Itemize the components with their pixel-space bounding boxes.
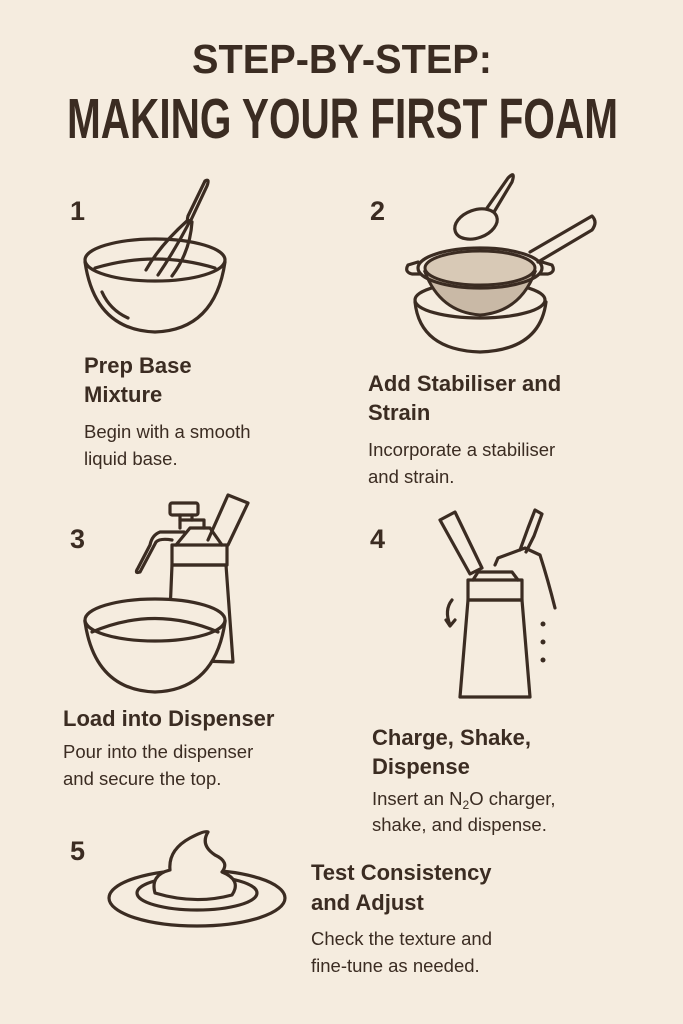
- icon: sieve and bowl with spoon: [407, 175, 595, 352]
- step 4: 2: [462, 798, 470, 812]
- icon: foam on plate: [109, 832, 285, 926]
- step 1: Mixture: [84, 382, 162, 407]
- step 4: Insert an N: [372, 788, 462, 809]
- step 2: Add Stabiliser and: [368, 371, 561, 396]
- title: [67, 36, 618, 151]
- step 2: 2: [370, 196, 385, 226]
- icon: dispenser and bowl: [85, 495, 248, 692]
- step 3: Load into Dispenser: [63, 706, 275, 731]
- step 4: Dispense: [372, 754, 470, 779]
- step 5: 5: [70, 836, 85, 866]
- step 1: Prep Base: [84, 353, 192, 378]
- step 3: and secure the top.: [63, 768, 221, 789]
- step 5: [70, 832, 492, 976]
- step 1: liquid base.: [84, 448, 178, 469]
- step 5: and Adjust: [311, 890, 425, 915]
- step 2: Strain: [368, 400, 430, 425]
- step 1: 1: [70, 196, 85, 226]
- title: STEP-BY-STEP:: [192, 36, 492, 82]
- step 4: [370, 510, 556, 835]
- step 2: Incorporate a stabiliser: [368, 439, 555, 460]
- step 1: [70, 180, 251, 469]
- step 4: shake, and dispense.: [372, 814, 547, 835]
- icon: cream whipper: [440, 510, 555, 697]
- step 5: Check the texture and: [311, 928, 492, 949]
- step 4: Charge, Shake,: [372, 725, 531, 750]
- step 2: and strain.: [368, 466, 454, 487]
- step 2: [368, 175, 595, 487]
- step 5: fine-tune as needed.: [311, 955, 480, 976]
- step 3: [63, 495, 275, 789]
- step 3: 3: [70, 524, 85, 554]
- step 5: Test Consistency: [311, 860, 492, 885]
- icon: bowl with whisk: [85, 180, 225, 332]
- step 3: Pour into the dispenser: [63, 741, 253, 762]
- step 4: 4: [370, 524, 385, 554]
- step 4: O charger,: [469, 788, 556, 809]
- step 1: Begin with a smooth: [84, 421, 251, 442]
